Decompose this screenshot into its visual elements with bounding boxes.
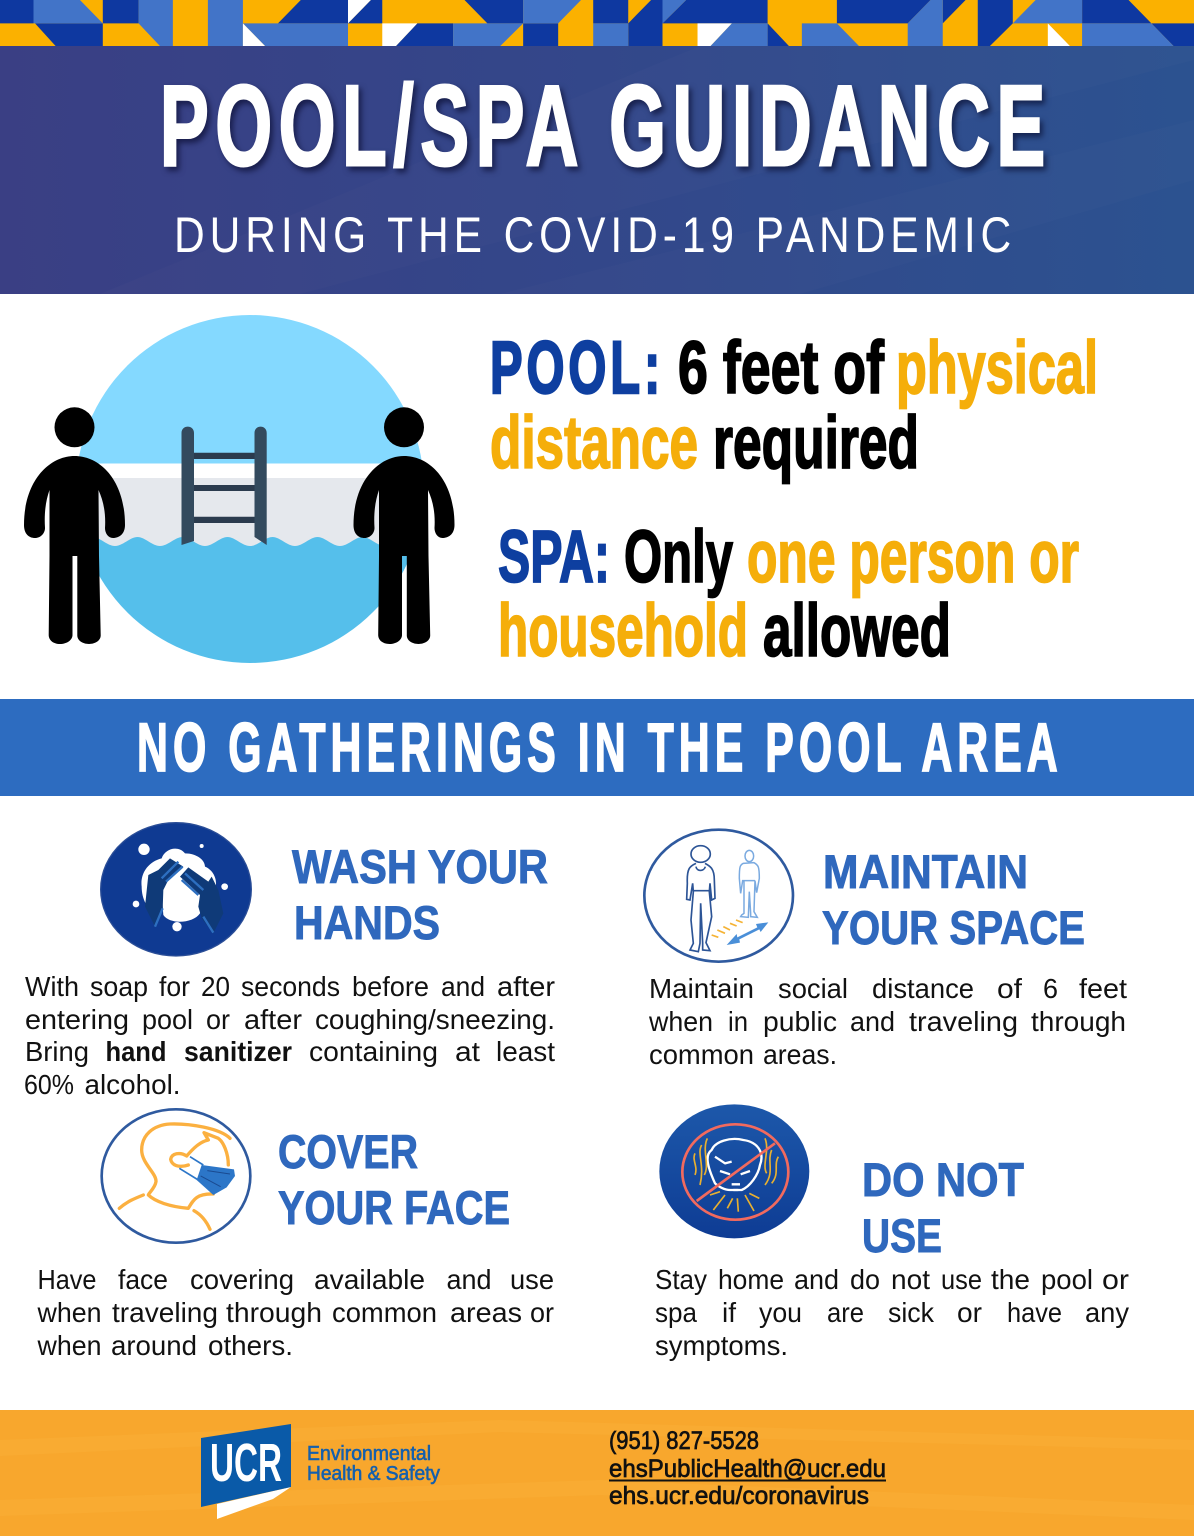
text: maintain your space: and — [850, 1006, 895, 1037]
text: maintain your space: through — [1031, 1006, 1126, 1037]
spa occupancy rule — [498, 515, 1079, 672]
pool distance rule — [490, 326, 1098, 484]
pool circle — [70, 310, 430, 670]
contact details: ehs.ucr.edu/coronavirus — [609, 1482, 869, 1510]
text: do not use — [655, 1264, 1129, 1361]
text: do not use: if — [722, 1297, 736, 1328]
text: maintain your space: 6 — [1043, 973, 1058, 1004]
text: do not use: are — [827, 1297, 864, 1328]
text: maintain your space: social — [778, 973, 848, 1004]
person right — [354, 407, 454, 644]
text: do not use: home — [718, 1264, 784, 1295]
icon: two people at a distance — [644, 830, 793, 962]
heading: wash your hands — [292, 840, 548, 949]
text: do not use: the — [991, 1264, 1030, 1295]
logo: UCR — [201, 1424, 291, 1519]
banner: no gatherings — [0, 699, 1194, 796]
text: wash your hands: alcohol. — [84, 1069, 180, 1100]
text: cover your face: when — [37, 1330, 102, 1361]
text: cover your face: others. — [208, 1330, 293, 1361]
text: cover your face: traveling — [112, 1297, 218, 1328]
logo text — [307, 1443, 440, 1485]
heading: maintain your space: MAINTAIN — [823, 845, 1028, 898]
text: maintain your space: distance — [872, 973, 974, 1004]
text: do not use: you — [759, 1297, 802, 1328]
text: wash your hands — [24, 971, 555, 1100]
text: maintain your space: public — [763, 1006, 837, 1037]
text: wash your hands: after — [497, 971, 555, 1002]
spa occupancy rule: household — [498, 589, 748, 672]
text: do not use: Stay — [655, 1264, 707, 1295]
icon: face mask — [102, 1109, 250, 1243]
text: maintain your space: of — [997, 973, 1022, 1004]
text: do not use: use — [941, 1264, 982, 1295]
text: do not use: pool — [1041, 1264, 1093, 1295]
icon: sick face crossed out — [659, 1104, 809, 1238]
spa occupancy rule: Only — [624, 515, 733, 598]
text: do not use: symptoms. — [655, 1330, 788, 1361]
text: wash your hands: containing — [309, 1036, 438, 1067]
text: wash your hands: for — [159, 971, 190, 1002]
text: wash your hands: hand — [106, 1036, 166, 1067]
contact details — [609, 1427, 886, 1510]
text: wash your hands: soap — [90, 971, 148, 1002]
pool distance rule: 6 feet of — [678, 326, 884, 409]
text: maintain your space: areas. — [763, 1039, 837, 1070]
text: cover your face: through — [226, 1297, 322, 1328]
heading: maintain your space — [822, 845, 1085, 954]
heading: wash your hands: WASH YOUR — [292, 840, 548, 893]
text: cover your face: around — [111, 1330, 197, 1361]
text: cover your face: or — [530, 1297, 554, 1328]
text: maintain your space: when — [648, 1006, 713, 1037]
text: do not use: sick — [888, 1297, 935, 1328]
pool distance rule: physical — [896, 326, 1098, 409]
spa occupancy rule: allowed — [763, 589, 951, 672]
text: cover your face: common — [332, 1297, 437, 1328]
pool ladder — [182, 427, 267, 545]
icon: washing hands — [101, 823, 251, 956]
text: wash your hands: coughing/sneezing. — [315, 1004, 555, 1035]
text: do not use: or — [957, 1297, 982, 1328]
heading: wash your hands: HANDS — [294, 896, 440, 949]
heading: do not use: USE — [862, 1209, 942, 1262]
text: wash your hands: Bring — [25, 1036, 89, 1067]
text: do not use: have — [1007, 1297, 1062, 1328]
heading: cover your face — [278, 1125, 510, 1234]
contact details: ehsPublicHealth@ucr.edu — [609, 1455, 886, 1483]
text: cover your face — [37, 1264, 554, 1361]
logo text: Environmental — [307, 1443, 431, 1465]
pool distance rule: distance — [490, 401, 698, 484]
text: wash your hands: after — [244, 1004, 302, 1035]
header band — [0, 46, 1194, 294]
text: cover your face: when — [37, 1297, 102, 1328]
text: wash your hands: and — [441, 971, 485, 1002]
text: cover your face: Have — [38, 1264, 96, 1295]
text: maintain your space: common — [649, 1039, 754, 1070]
text: wash your hands: seconds — [241, 971, 340, 1002]
text: maintain your space — [648, 973, 1127, 1070]
title: POOL/SPA GUIDANCE — [160, 63, 1045, 190]
text: wash your hands: at — [455, 1036, 480, 1067]
text: wash your hands: 60% — [24, 1069, 74, 1100]
text: wash your hands: entering — [25, 1004, 129, 1035]
heading: cover your face: COVER — [278, 1125, 418, 1178]
text: maintain your space: feet — [1079, 973, 1127, 1004]
pool distance rule: required — [713, 401, 919, 484]
text: do not use: not — [891, 1264, 930, 1295]
text: cover your face: face — [118, 1264, 168, 1295]
pool illustration with two people — [24, 310, 454, 670]
text: do not use: and — [794, 1264, 839, 1295]
subtitle: DURING THE COVID-19 PANDEMIC — [174, 207, 1011, 263]
text: maintain your space: traveling — [909, 1006, 1018, 1037]
text: wash your hands: pool — [142, 1004, 193, 1035]
person left — [24, 407, 125, 644]
decorative geometric top strip — [0, 0, 1194, 46]
text: do not use: spa — [655, 1297, 697, 1328]
logo text: Health & Safety — [307, 1463, 440, 1485]
pool distance rule: POOL: — [490, 327, 660, 410]
text: wash your hands: 20 — [201, 971, 230, 1002]
heading: maintain your space: YOUR SPACE — [822, 901, 1085, 954]
text: cover your face: and — [446, 1264, 492, 1295]
text: do not use: any — [1085, 1297, 1129, 1328]
text: wash your hands: or — [206, 1004, 230, 1035]
text: cover your face: available — [314, 1264, 425, 1295]
banner: no gatherings: NO GATHERINGS IN THE POOL AREA — [137, 710, 1058, 787]
text: do not use: do — [850, 1264, 880, 1295]
heading: do not use — [862, 1153, 1024, 1262]
logo: UCR: UCR — [210, 1433, 282, 1493]
text: do not use: or — [1102, 1264, 1129, 1295]
heading: cover your face: YOUR FACE — [278, 1181, 510, 1234]
text: maintain your space: in — [728, 1006, 748, 1037]
footer band — [0, 1410, 1194, 1536]
spa occupancy rule: SPA: — [498, 515, 610, 598]
text: cover your face: use — [510, 1264, 554, 1295]
text: wash your hands: least — [496, 1036, 555, 1067]
text: cover your face: areas — [450, 1297, 522, 1328]
text: wash your hands: before — [352, 971, 429, 1002]
text: maintain your space: Maintain — [649, 973, 754, 1004]
heading: do not use: DO NOT — [862, 1153, 1024, 1206]
text: wash your hands: With — [25, 971, 79, 1002]
text: cover your face: covering — [190, 1264, 294, 1295]
contact details: (951) 827-5528 — [609, 1427, 759, 1455]
text: wash your hands: sanitizer — [184, 1036, 292, 1067]
